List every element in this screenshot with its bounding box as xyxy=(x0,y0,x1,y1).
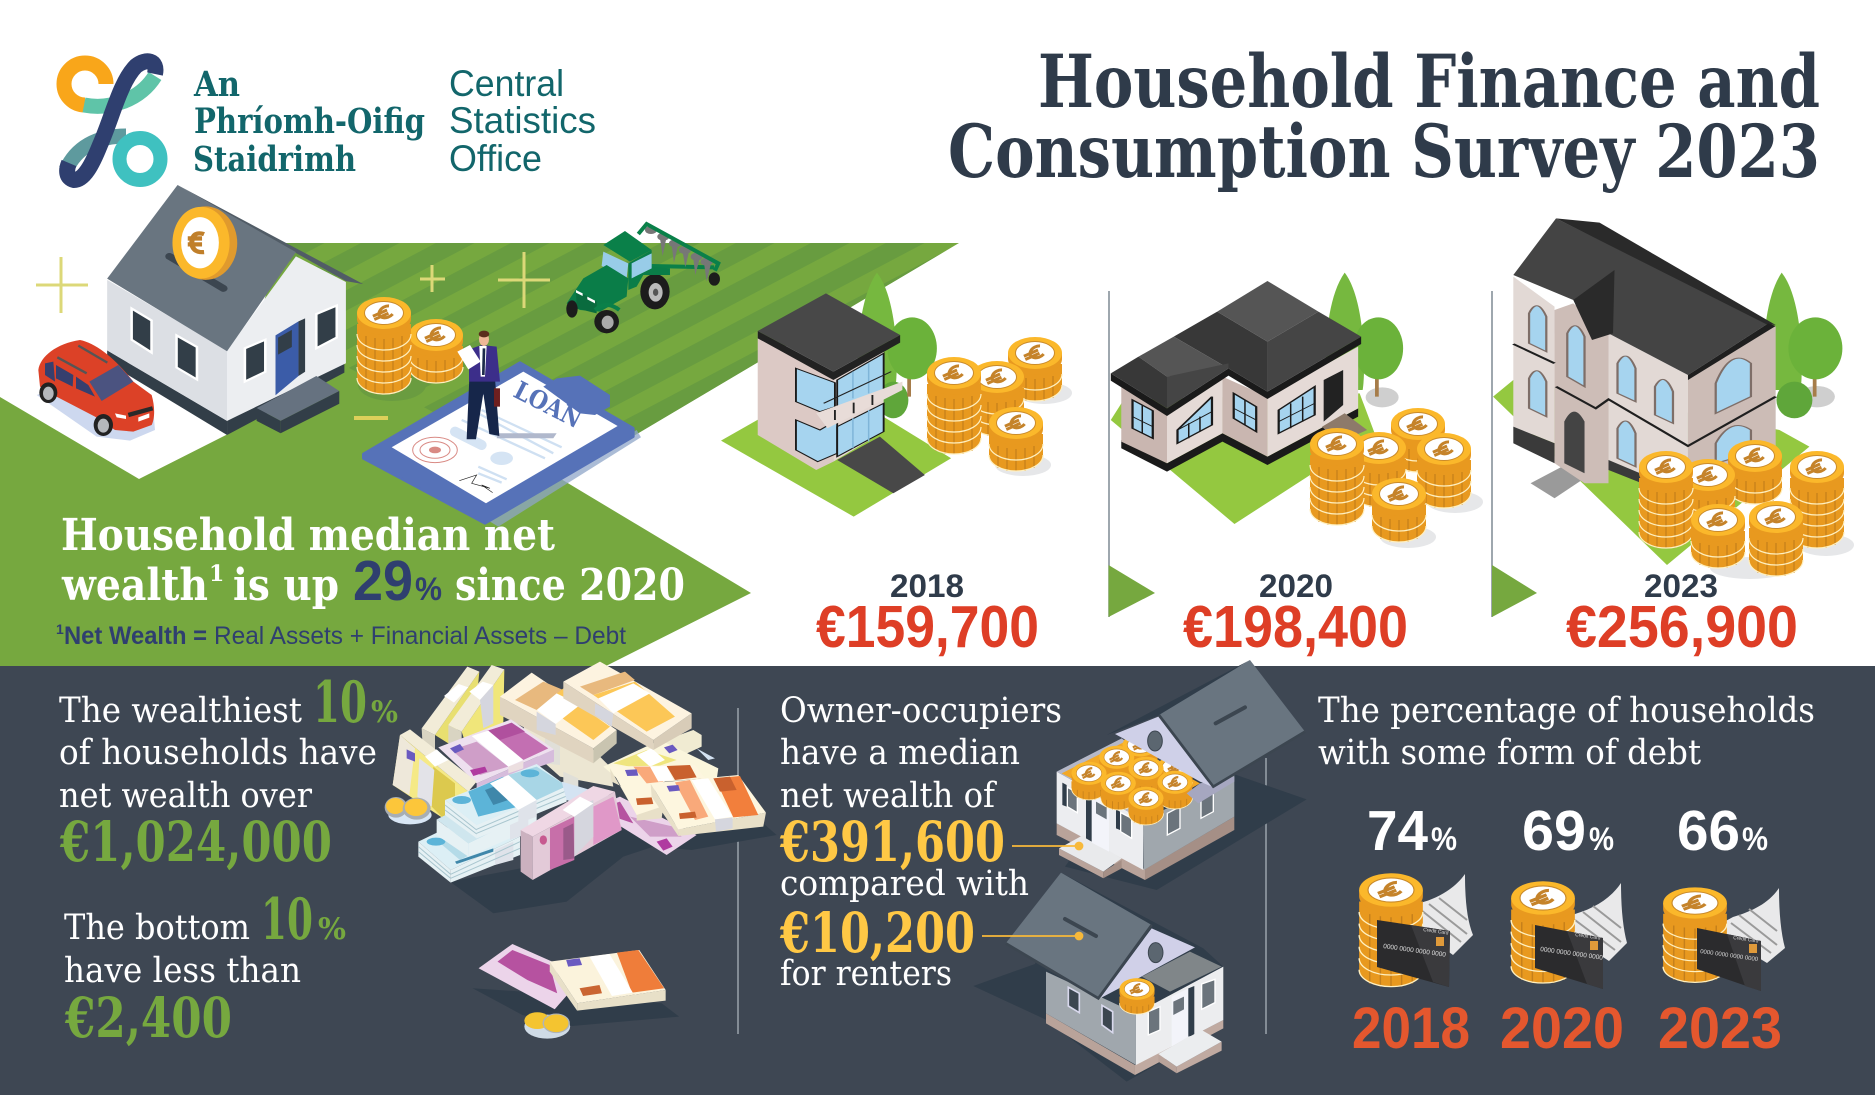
label: 2018 value: 2018 xyxy=(890,568,964,604)
illustration: tractor xyxy=(566,224,720,333)
text: owner-occupiers and renters: €391,600 xyxy=(779,809,1005,874)
label: 2020 value: 2020 xyxy=(1259,568,1333,604)
panel divider: 2023 xyxy=(1492,291,1537,617)
label: 2020 value xyxy=(1183,568,1408,660)
gold bundle xyxy=(593,730,617,763)
headline: median net wealth up 29%: 1 xyxy=(209,561,224,587)
label: 2018 value xyxy=(816,568,1039,660)
panel divider: 2020 xyxy=(1108,291,1155,617)
footnote: net wealth definition: Net Wealth = xyxy=(64,622,207,650)
label: 2020 value: €198,400 xyxy=(1183,594,1408,660)
debt years: 2023 xyxy=(1658,996,1782,1061)
headline: median net wealth up 29%: % xyxy=(415,571,442,607)
coin stacks 2023 xyxy=(1639,440,1854,579)
text: bottom 10%: The bottom xyxy=(64,908,250,948)
headline: median net wealth up 29%: Household median net xyxy=(61,510,556,561)
owner house coins xyxy=(1071,733,1193,825)
house 2018 xyxy=(721,273,951,517)
icon: coins, receipt and credit card 2023 xyxy=(1663,887,1785,991)
headline: median net wealth up 29%: is up xyxy=(233,560,339,611)
pink bundle xyxy=(521,830,533,880)
debt percentages: 66 xyxy=(1677,799,1740,863)
logo text: Irish: Phríomh-Oifig xyxy=(194,101,425,142)
house 2020 xyxy=(1111,273,1403,524)
headline: median net wealth up 29%: 29 xyxy=(353,549,413,613)
headline: median net wealth up 29% xyxy=(61,510,685,613)
illustration: house with coin on roof xyxy=(107,185,363,435)
loan label: LOAN xyxy=(509,376,587,434)
debt percentages xyxy=(1367,799,1768,863)
logo text: Irish xyxy=(193,64,425,180)
tan bundle xyxy=(653,713,692,750)
text: owner-occupiers and renters: compared with xyxy=(780,864,1029,904)
house 2023 xyxy=(1493,218,1842,565)
background: dark lower panel xyxy=(0,666,1875,1095)
text: owner-occupiers and renters xyxy=(779,691,1062,994)
text: bottom 10%: have less than xyxy=(64,951,301,991)
icon: coins, receipt and credit card 2018 xyxy=(1359,873,1473,987)
text: bottom 10% xyxy=(64,886,346,1050)
house roof xyxy=(178,185,363,284)
text: bottom 10%: €2,400 xyxy=(64,985,232,1050)
callout lines to houses xyxy=(982,842,1082,940)
text: owner-occupiers and renters: €10,200 xyxy=(779,900,975,965)
label: 2023 value: €256,900 xyxy=(1566,594,1798,660)
house windows xyxy=(132,306,337,382)
icon: coins, receipt and credit card 2020: 0000 0000 0000 0000 xyxy=(1540,946,1604,962)
illustration: coin stacks by the house xyxy=(357,297,463,401)
owner house roof xyxy=(1115,660,1305,803)
debt percentages: % xyxy=(1431,821,1457,857)
debt percentages: % xyxy=(1742,821,1768,857)
debt percentages: 74 xyxy=(1367,799,1428,863)
text: wealthiest 10%: % xyxy=(371,695,398,730)
debt percentages: % xyxy=(1589,821,1614,857)
text: wealthiest 10%: net wealth over xyxy=(59,776,312,816)
logo text: English: Statistics xyxy=(449,100,596,141)
illustration: large money pile xyxy=(385,662,777,913)
blue bundles xyxy=(418,842,451,883)
text: owner-occupiers and renters: net wealth of xyxy=(780,776,998,816)
text: bottom 10%: % xyxy=(318,912,346,947)
debt percentages: 69 xyxy=(1522,799,1586,863)
logo text: English xyxy=(449,63,596,179)
icon: coins, receipt and credit card 2023: 0000 0000 0000 0000 xyxy=(1700,949,1759,963)
logo text: English: Central xyxy=(449,63,564,104)
illustration: businessman xyxy=(457,331,500,439)
coin stacks 2020 xyxy=(1310,408,1483,548)
coin stacks 2018 xyxy=(927,337,1072,476)
text: wealthiest 10%: 10 xyxy=(313,669,367,736)
headline: median net wealth up 29%: since 2020 xyxy=(455,560,685,611)
footnote: net wealth definition: 1 xyxy=(56,621,64,637)
text: wealthiest 10% xyxy=(59,669,398,874)
cream bundles beneath xyxy=(523,723,613,787)
label: 2023 value: 2023 xyxy=(1644,568,1718,604)
logo: Central Statistics Office xyxy=(64,61,596,180)
text: households with debt: The percentage of households xyxy=(1318,691,1815,731)
logo mark xyxy=(64,61,160,180)
text: wealthiest 10%: The wealthiest xyxy=(59,691,302,731)
headline: median net wealth up 29%: wealth xyxy=(61,560,208,611)
illustration: loan clipboard xyxy=(363,363,641,527)
house step xyxy=(257,376,339,421)
text: owner-occupiers and renters: Owner-occupiers xyxy=(780,691,1062,731)
illustration: owner-occupier house with many coins xyxy=(1057,660,1307,890)
title xyxy=(948,39,1820,195)
footnote: net wealth definition: Real Assets + Financial Assets – Debt xyxy=(214,622,626,650)
icon: coins, receipt and credit card 2020 xyxy=(1511,881,1627,989)
text: households with debt: with some form of debt xyxy=(1318,733,1701,773)
yellow bundle xyxy=(393,735,468,818)
text: owner-occupiers and renters: for renters xyxy=(780,954,952,994)
text: owner-occupiers and renters: have a median xyxy=(780,733,1020,773)
footnote: net wealth definition xyxy=(56,621,626,650)
text: wealthiest 10%: €1,024,000 xyxy=(59,809,332,874)
text: wealthiest 10%: of households have xyxy=(59,733,377,773)
text: bottom 10%: 10 xyxy=(261,886,313,953)
orange bundles xyxy=(610,768,663,821)
illustration: small money pile xyxy=(473,944,679,1039)
back upright bundles xyxy=(422,728,435,750)
debt years xyxy=(1352,996,1782,1061)
debt years: 2018 xyxy=(1352,996,1470,1061)
purple bundle xyxy=(477,749,554,788)
roof coin xyxy=(174,206,237,280)
divider lines xyxy=(738,708,1266,1034)
icon: coins, receipt and credit card 2023: Credit Card xyxy=(1733,935,1759,945)
house walls xyxy=(107,350,227,435)
label: 2023 value xyxy=(1566,568,1798,660)
logo text: English: Office xyxy=(449,138,542,179)
illustration: sparkles xyxy=(36,239,550,418)
illustration: red car xyxy=(37,340,155,441)
logo text: Irish: Staidrimh xyxy=(193,139,356,180)
green field and arrow band xyxy=(0,243,959,666)
icon: coins, receipt and credit card 2018: Credit Card xyxy=(1423,927,1449,937)
logo text: Irish: An xyxy=(193,64,240,105)
icon: coins, receipt and credit card 2020: Credit Card xyxy=(1575,932,1601,942)
illustration: renter house with one coin xyxy=(973,873,1223,1082)
icon: coins, receipt and credit card 2018: 0000 0000 0000 0000 xyxy=(1383,943,1447,959)
text: households with debt xyxy=(1318,691,1815,773)
loose 500 note xyxy=(592,797,697,855)
house door xyxy=(298,318,305,376)
renter house coin xyxy=(1119,978,1155,1014)
debt years: 2020 xyxy=(1500,996,1624,1061)
label: 2018 value: €159,700 xyxy=(816,594,1039,660)
coins xyxy=(388,806,432,824)
